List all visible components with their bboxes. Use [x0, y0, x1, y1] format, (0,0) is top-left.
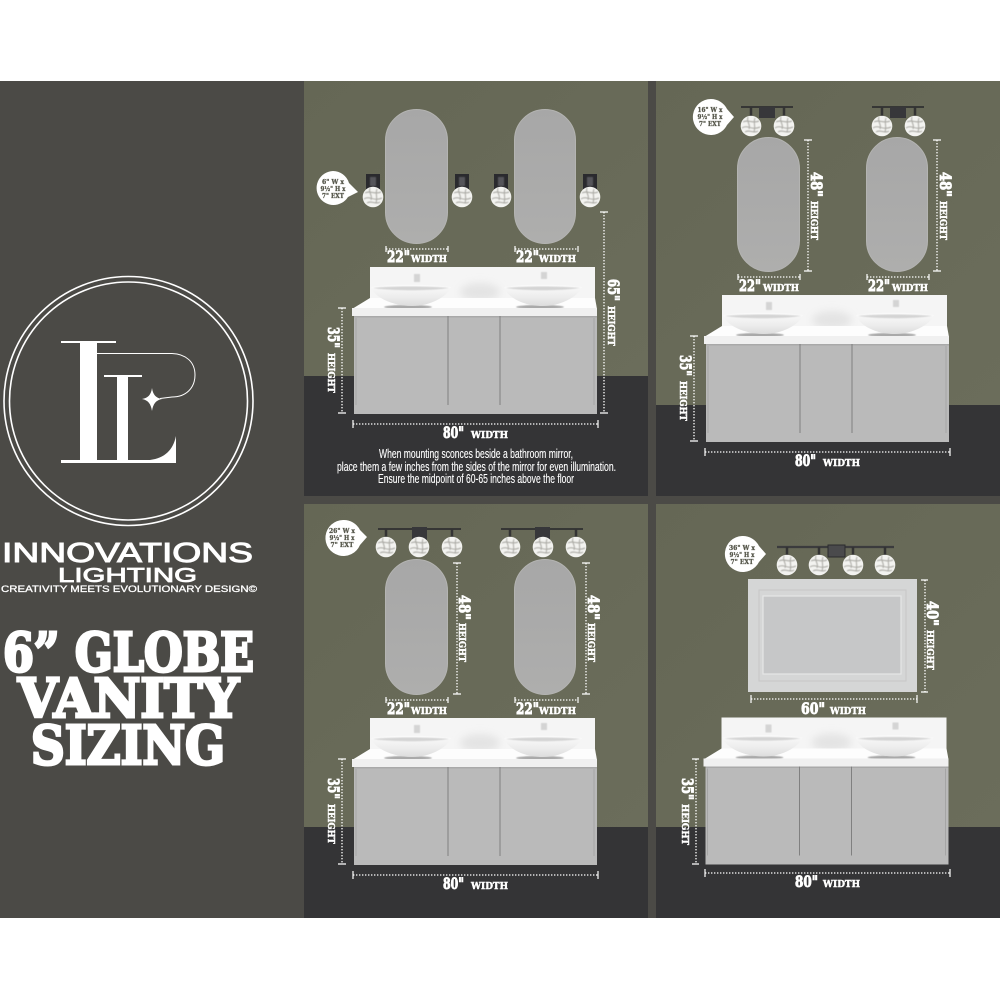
- size callout: 9½" H x: [730, 551, 755, 559]
- dimensions: 35": [324, 327, 343, 348]
- dimensions: 48": [936, 172, 955, 197]
- brand wordmark: INNOVATIONS: [2, 537, 253, 568]
- size callout: 7" EXT: [699, 120, 721, 128]
- mirrors: [386, 560, 576, 694]
- dimensions: [678, 580, 950, 891]
- size callout: 7" EXT: [330, 541, 354, 549]
- title: VANITY: [17, 668, 240, 730]
- dimensions: WIDTH: [538, 707, 576, 717]
- size callout: 9½" H x: [320, 185, 346, 193]
- rectangular framed mirror: [748, 579, 917, 692]
- panel: 4-light vanity: [656, 504, 1000, 918]
- dimensions: 35": [676, 355, 695, 376]
- dimensions: WIDTH: [470, 882, 508, 892]
- dimensions: HEIGHT: [679, 804, 689, 845]
- dimensions: 22": [739, 276, 761, 295]
- size callout: 9½" H x: [330, 534, 355, 542]
- dimensions: 48": [584, 595, 603, 620]
- dimensions: 60": [801, 699, 825, 718]
- size callout: 7" EXT: [730, 558, 754, 566]
- brand wordmark: [1, 537, 257, 595]
- size callout: 9½" H x: [698, 113, 723, 121]
- mounting note: When mounting sconces beside a bathroom mirror,: [379, 447, 573, 461]
- dimensions: 40": [923, 601, 942, 626]
- dimensions: WIDTH: [822, 880, 860, 890]
- dimensions: WIDTH: [410, 255, 447, 265]
- size callout: 6" W x: [322, 178, 344, 186]
- dimensions: WIDTH: [410, 707, 447, 717]
- mounting note: Ensure the midpoint of 60-65 inches above the floor: [378, 472, 574, 486]
- dimensions: WIDTH: [538, 255, 576, 265]
- size callout: 16" W x: [698, 106, 723, 114]
- panel: 3-light vanity: [304, 504, 648, 918]
- brand wordmark: LIGHTING: [58, 565, 197, 587]
- vanity: [352, 718, 597, 865]
- sconce lights: [363, 174, 600, 207]
- dimensions: 22": [516, 699, 539, 718]
- dimensions: WIDTH: [829, 707, 866, 717]
- dimensions: WIDTH: [762, 284, 799, 294]
- mounting note: place them a few inches from the sides of the mirror for even illumination.: [337, 460, 616, 474]
- dimensions: 35": [678, 778, 697, 800]
- mirrors: [738, 138, 928, 272]
- dimensions: 48": [455, 595, 474, 620]
- brand wordmark: CREATIVITY MEETS EVOLUTIONARY DESIGN©: [1, 584, 257, 595]
- dimensions: 80": [443, 874, 464, 893]
- dimensions: 80": [443, 423, 464, 442]
- dimensions: WIDTH: [470, 431, 508, 441]
- mirrors: [386, 110, 576, 244]
- dimensions: 22": [387, 699, 410, 718]
- mounting note: [337, 447, 616, 486]
- dimensions: HEIGHT: [456, 623, 466, 662]
- dimensions: 35": [324, 778, 343, 799]
- dimensions: 80": [795, 451, 816, 470]
- dimensions: HEIGHT: [325, 804, 335, 844]
- dimensions: WIDTH: [822, 459, 860, 469]
- dimensions: HEIGHT: [605, 306, 615, 346]
- title: [3, 622, 254, 777]
- size callout: [325, 520, 367, 556]
- dimensions: 48": [807, 172, 826, 197]
- logo: IL monogram in double ring: [4, 276, 253, 526]
- size callout: [317, 171, 358, 205]
- dimensions: WIDTH: [891, 284, 928, 294]
- dimensions: 22": [516, 247, 539, 266]
- size callout: [693, 99, 734, 135]
- vanity: [352, 267, 597, 414]
- dimensions: HEIGHT: [325, 353, 335, 393]
- 4-light fixture: [777, 545, 895, 575]
- dimensions: HEIGHT: [585, 623, 595, 662]
- dimensions: [324, 563, 603, 893]
- 3-light fixtures: [376, 527, 586, 557]
- size callout: 36" W x: [729, 544, 755, 552]
- panel: 2-light vanity: [656, 81, 1000, 496]
- 2-light fixtures: [741, 107, 925, 136]
- dimensions: 65": [604, 279, 623, 301]
- dimensions: [324, 212, 623, 442]
- title: 6” GLOBE: [3, 622, 254, 684]
- size callout: 26" W x: [329, 527, 355, 535]
- title: SIZING: [31, 715, 225, 777]
- vanity: [704, 295, 949, 442]
- size callout: 7" EXT: [322, 192, 344, 200]
- dimensions: HEIGHT: [924, 630, 934, 670]
- dimensions: HEIGHT: [677, 381, 687, 421]
- dimensions: [676, 140, 955, 470]
- dimensions: HEIGHT: [808, 201, 818, 240]
- dimensions: HEIGHT: [937, 201, 947, 240]
- dimensions: 22": [868, 276, 890, 295]
- panel: sconces: [304, 81, 648, 496]
- dimensions: 80": [795, 872, 818, 891]
- vanity: [704, 718, 948, 864]
- dimensions: 22": [387, 247, 410, 266]
- size callout: [725, 536, 766, 572]
